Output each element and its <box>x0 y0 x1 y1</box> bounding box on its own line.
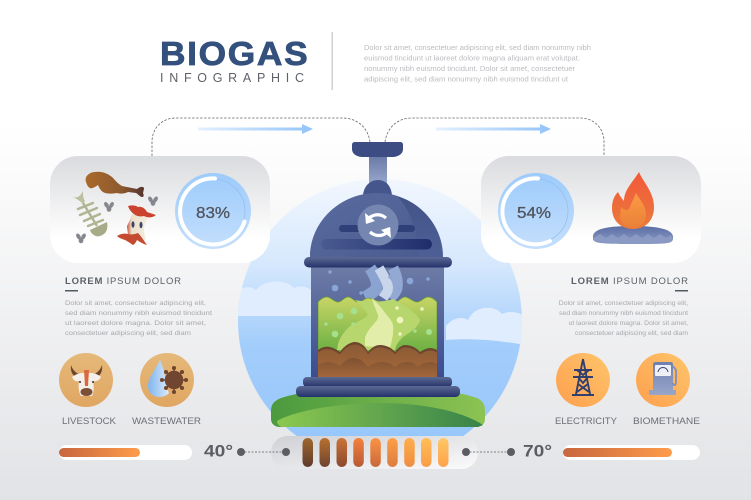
icon: gas burner <box>593 226 673 244</box>
tank ring <box>304 257 452 268</box>
intro text block: nonummy nibh euismod tincidunt. Dolor sit amet, consectetuer <box>364 66 576 73</box>
paragraph right: ut laoreet dolore magna. Dolor sit amet, <box>569 320 688 327</box>
icon: fish bone <box>73 191 107 236</box>
tank stem <box>369 157 387 185</box>
paragraph left: sed diam nonummy nibh euismod tincidunt <box>65 310 212 317</box>
label: electricity: ELECTRICITY <box>555 416 617 426</box>
intro text block: Dolor sit amet, consectetuer adipiscing elit, sed diam nonummy nibh <box>364 45 591 52</box>
dome upper slot <box>339 225 415 232</box>
icons: flies <box>75 196 159 243</box>
icon: wastewater <box>140 353 194 407</box>
paragraph left: consectetuer adipiscing elit, sed diam <box>65 330 191 337</box>
green slime <box>318 297 437 378</box>
title: BIOGAS <box>160 36 308 73</box>
progress bar left <box>59 445 192 460</box>
label: livestock: LIVESTOCK <box>62 416 116 426</box>
arrow left <box>198 124 313 134</box>
ground highlight <box>277 403 483 427</box>
sky circle with clouds <box>238 180 522 436</box>
temperature 40 degrees: 40° <box>204 442 233 460</box>
biogas digester tank <box>296 142 460 397</box>
intro text block: adipiscing elit, sed diam nonummy nibh euismod tincidunt ut <box>364 76 568 84</box>
label: wastewater: WASTEWATER <box>132 416 202 426</box>
progress ring: 54% <box>498 173 574 249</box>
paragraph right <box>559 300 688 337</box>
icon: livestock <box>59 353 113 407</box>
bubbles above slime <box>328 270 430 295</box>
tank base steps <box>296 377 460 397</box>
temperature 70 degrees: 70° <box>523 442 552 460</box>
paragraph left: Dolor sit amet, consectetuer adipiscing elit, <box>65 300 206 307</box>
temperature 70 degrees <box>462 442 552 460</box>
paragraph left: ut laoreet dolore magna. Dolor sit amet, <box>65 320 206 327</box>
icon: flame <box>612 172 654 229</box>
title: INFOGRAPHIC <box>160 71 304 85</box>
panel: energy output <box>481 156 701 263</box>
dome <box>310 193 443 257</box>
intro text block: euismod tincidunt ut laoreet dolore magna aliquam erat volutpat. <box>364 56 580 62</box>
icon: chicken leg <box>86 172 144 197</box>
progress ring: 83%: 83% <box>196 205 230 222</box>
dome lower slot <box>321 239 432 250</box>
heading left: LOREM IPSUM DOLOR <box>65 276 181 287</box>
dashed connector left <box>152 118 370 186</box>
progress ring: 54%: 54% <box>517 205 551 222</box>
icon: biomethane <box>636 353 690 407</box>
soil layer <box>318 342 437 354</box>
heading right: LOREM IPSUM DOLOR <box>571 276 688 287</box>
tank top handle <box>352 142 403 157</box>
dashed connector right <box>385 118 604 186</box>
arrow right <box>436 124 551 134</box>
paragraph right: consectetuer adipiscing elit, sed diam <box>575 330 688 337</box>
tank body <box>311 265 444 377</box>
label: biomethane: BIOMETHANE <box>633 416 700 426</box>
progress bar right <box>563 445 700 460</box>
paragraph left <box>65 300 212 337</box>
icon: apple core <box>117 205 156 245</box>
temperature gauge bars <box>302 438 448 467</box>
dome cap <box>363 180 392 195</box>
intro text block <box>364 45 591 84</box>
panel: waste input <box>50 156 270 263</box>
steam <box>365 268 397 298</box>
icon: electricity <box>556 353 610 407</box>
temperature 40 degrees <box>204 442 290 460</box>
paragraph right: Dolor sit amet, consectetuer adipiscing elit, <box>559 300 688 307</box>
ground mound <box>271 388 485 427</box>
temperature capsule <box>271 436 478 469</box>
paragraph right: sed diam nonummy nibh euismod tincidunt <box>559 310 688 317</box>
recycle icon <box>358 204 398 246</box>
progress ring: 83% <box>175 173 251 249</box>
